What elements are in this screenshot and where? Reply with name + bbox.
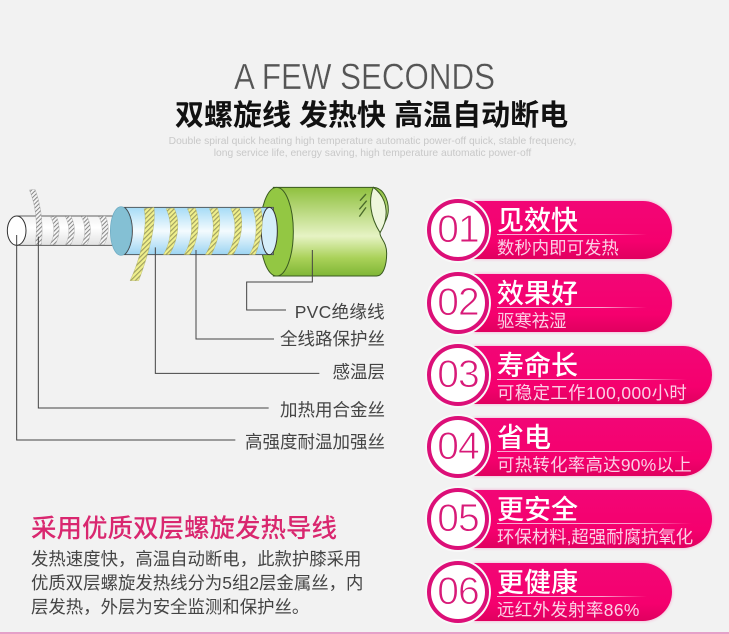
label: PVC insulation: PVC绝缘线 [295, 302, 385, 322]
number 06: 06 [437, 570, 479, 613]
number 05 [427, 488, 489, 550]
bottom accent line [0, 632, 729, 634]
number 04: 04 [437, 425, 479, 468]
number 03 [427, 344, 489, 406]
pill 06: 更健康 [497, 568, 578, 598]
pill 05: 更安全 [497, 495, 578, 525]
text block: description: 层发热，外层为安全监测和保护丝。 [31, 597, 309, 617]
pill 02: 驱寒祛湿 [497, 311, 567, 331]
pill 03: 可稳定工作100,000小时 [497, 383, 687, 403]
number 05: 05 [437, 497, 479, 540]
number 04 [427, 416, 489, 478]
number 01 [427, 199, 489, 261]
cable: blue temperature sensing layer [110, 207, 277, 255]
cable: alloy wire windings [29, 189, 108, 245]
pill 02: 效果好 [497, 279, 578, 309]
number 02: 02 [437, 281, 479, 324]
text block: description: 发热速度快，高温自动断电，此款护膝采用 [31, 549, 361, 569]
text block: description: 优质双层螺旋发热线分为5组2层金属丝，内 [31, 573, 363, 593]
pill 01: 数秒内即可发热 [497, 238, 619, 258]
pill 06: 远红外发射率86% [497, 600, 640, 620]
number 02 [427, 272, 489, 334]
pill 02 [473, 274, 672, 332]
cable: white inner core [7, 216, 123, 245]
pill 04: 省电 [497, 423, 551, 453]
pill 03 [473, 346, 712, 404]
pill 03: 寿命长 [497, 351, 578, 381]
subtitle: English description: Double spiral quick heating high temperature automatic power-off quick, stable frequency, [169, 136, 576, 147]
pill 01 [473, 201, 672, 259]
heading: Chinese title: 双螺旋线 发热快 高温自动断电 [175, 100, 568, 132]
subtitle: English description [169, 136, 576, 159]
cable: yellow protective wire [130, 207, 262, 281]
pill 04 [473, 418, 712, 476]
text block: description [31, 549, 363, 617]
diagram: heating cable cross-section [6, 186, 389, 440]
heading: A FEW SECONDS: A FEW SECONDS [234, 56, 495, 97]
cable: green PVC jacket [260, 187, 388, 276]
pill 05: 环保材料,超强耐腐抗氧化 [497, 527, 693, 547]
number 01: 01 [437, 208, 479, 251]
subtitle: English description: long service life, energy saving, high temperature automatic power-off [214, 148, 531, 159]
label: alloy wire: 加热用合金丝 [280, 400, 385, 420]
pill 04: 可热转化率高达90%以上 [497, 455, 692, 475]
leader lines [17, 235, 319, 440]
number 03: 03 [437, 353, 479, 396]
pill 01: 见效快 [497, 206, 578, 236]
label: sensing layer: 感温层 [332, 362, 385, 382]
label: protection wire: 全线路保护丝 [280, 329, 385, 349]
heading: spiral wire: 采用优质双层螺旋发热导线 [31, 515, 337, 543]
number 06 [427, 561, 489, 623]
pill 06 [473, 563, 672, 621]
label: reinforcement wire: 高强度耐温加强丝 [245, 432, 385, 452]
pill 05 [473, 490, 712, 548]
